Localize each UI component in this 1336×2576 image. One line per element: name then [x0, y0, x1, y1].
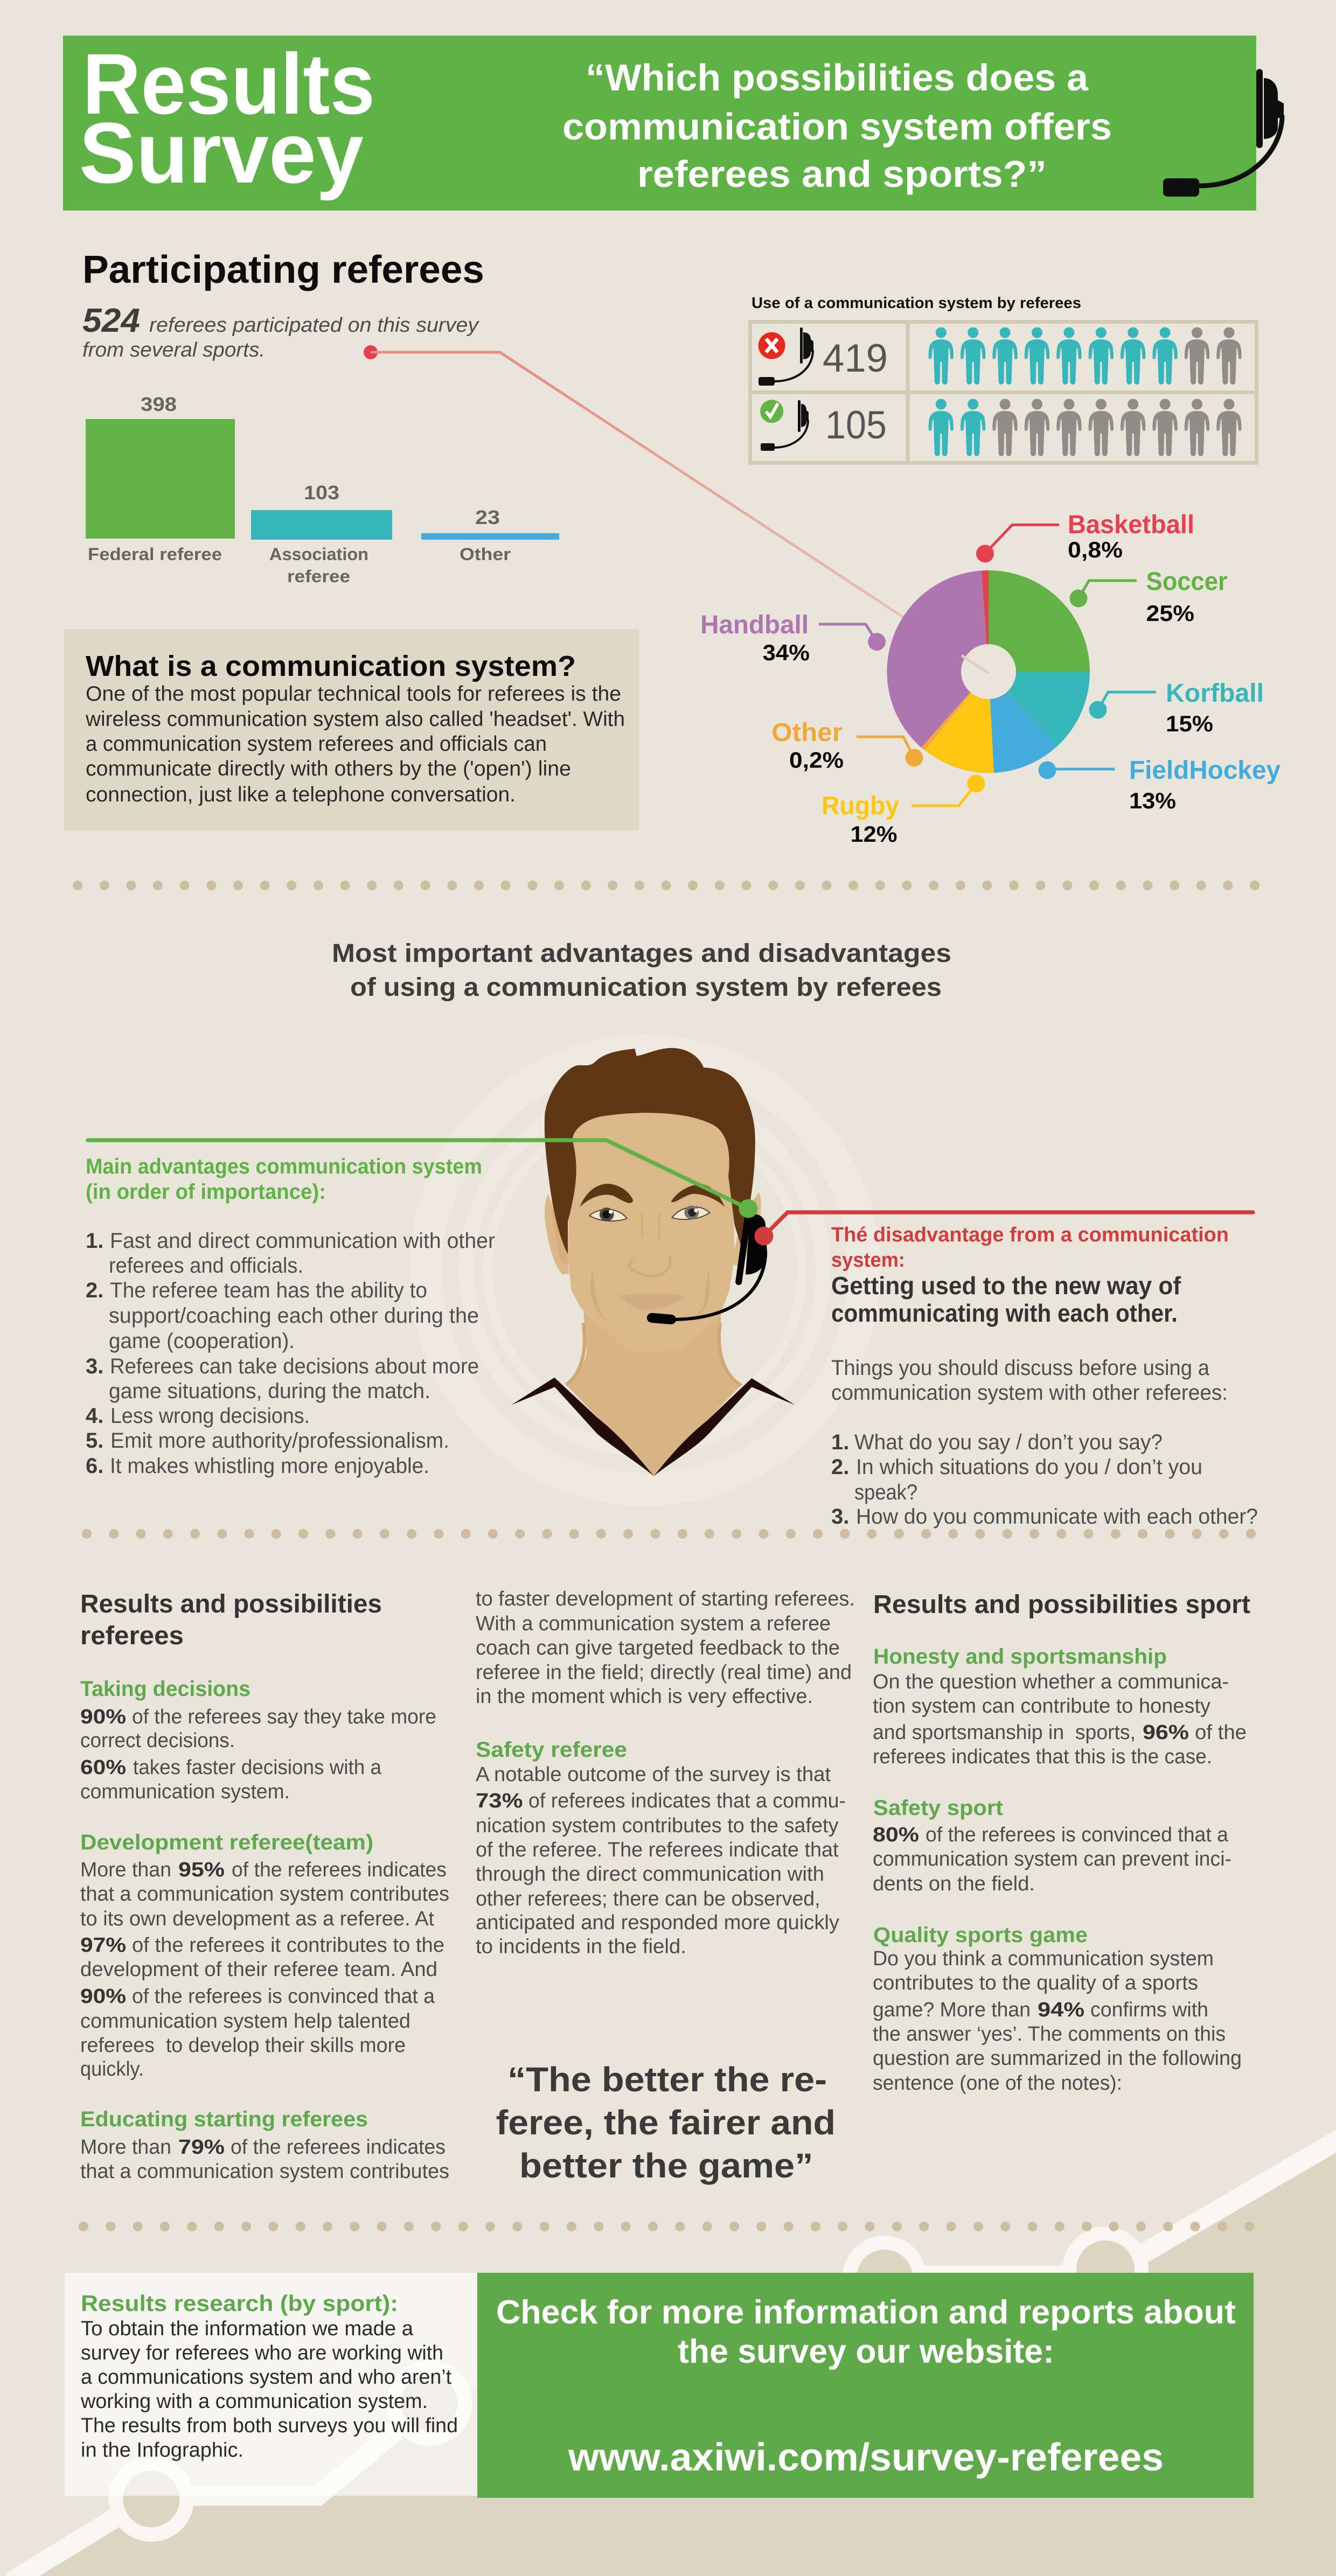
label: korfball: Korfball	[1166, 679, 1264, 708]
column: results and possibilities sport: confirms with	[1090, 1999, 1208, 2021]
hair	[545, 1048, 755, 1254]
column: results and possibilities referees: Educating starting referees	[80, 2107, 368, 2131]
column: continued and safety referee: to incidents in the field.	[476, 1936, 686, 1958]
label: other: Other	[771, 718, 843, 747]
pull quote: better the game”	[519, 2146, 813, 2185]
title: Results	[82, 36, 375, 132]
text block: the disadvantage	[831, 1224, 1258, 1528]
column: results and possibilities sport: referees indicates that this is the case.	[873, 1746, 1212, 1768]
text block: main advantages: 2.	[86, 1279, 103, 1302]
column: results and possibilities referees: of the referees indicates	[232, 1859, 447, 1881]
panel: what is a communication system	[64, 629, 639, 830]
column: results and possibilities sport: contributes to the quality of a sports	[873, 1972, 1198, 1994]
nose	[629, 1256, 670, 1276]
text block: main advantages: 4.	[86, 1404, 103, 1428]
ears	[545, 1194, 569, 1274]
column: results and possibilities sport: question are summarized in the following	[873, 2047, 1242, 2070]
column: results and possibilities referees: referees to develop their skills more	[80, 2034, 406, 2057]
panel: website call to action	[477, 2273, 1254, 2498]
text block: the disadvantage: Things you should discuss before using a	[831, 1356, 1210, 1380]
bar chart: 23	[475, 506, 500, 528]
label: soccer: Soccer	[1146, 568, 1227, 596]
column: results and possibilities sport: Safety sport	[873, 1796, 1003, 1820]
label: rugby	[822, 774, 985, 847]
mouth	[620, 1293, 685, 1310]
column: results and possibilities referees: quickly.	[80, 2058, 144, 2081]
text block: the disadvantage: 2.	[831, 1455, 849, 1479]
text block: main advantages: support/coaching each other during the	[109, 1304, 479, 1328]
text block: main advantages: Less wrong decisions.	[110, 1404, 310, 1428]
column: results and possibilities referees: communication system help talented	[80, 2010, 410, 2033]
column: results and possibilities sport: the answer ‘yes’. The comments on this	[873, 2023, 1226, 2046]
panel: what is a communication system: What is a communication system?	[86, 650, 576, 682]
label: soccer	[1070, 568, 1227, 626]
collar	[511, 1378, 795, 1476]
column: results and possibilities referees: More than	[80, 2136, 171, 2159]
text block: main advantages: game situations, during the match.	[109, 1379, 430, 1403]
label: handball	[700, 611, 886, 665]
column: results and possibilities sport: Quality sports game	[873, 1923, 1088, 1947]
text block: the disadvantage: 1.	[831, 1430, 849, 1454]
column: results and possibilities referees: development of their referee team. And	[80, 1958, 437, 1981]
panel: results research: Results research (by sport):	[81, 2291, 398, 2316]
panel: website call to action: the survey our website:	[678, 2333, 1054, 2370]
column: results and possibilities sport: sentence (one of the notes):	[873, 2072, 1122, 2095]
connector: referees to pie	[364, 345, 989, 673]
column: results and possibilities referees: 60%	[80, 1756, 126, 1779]
text block: main advantages: The referee team has the ability to	[110, 1279, 427, 1302]
column: results and possibilities referees: to its own development as a referee. At	[80, 1908, 434, 1930]
panel: participating referees	[82, 248, 559, 586]
column: results and possibilities referees: of the referees is convinced that a	[132, 1985, 435, 2008]
icon: no headset	[759, 327, 813, 386]
panel: results research: in the Infographic.	[81, 2439, 243, 2461]
panel: results research: working with a communication system.	[80, 2390, 428, 2413]
pull quote: “The better the re-	[507, 2060, 827, 2099]
neck	[566, 1300, 741, 1476]
text block: the disadvantage: 3.	[831, 1505, 849, 1528]
column: continued and safety referee: Safety referee	[476, 1738, 627, 1762]
text block: main advantages: (in order of importance):	[86, 1180, 326, 1204]
callout line: advantages	[88, 1140, 757, 1218]
column: results and possibilities sport: of the referees is convinced that a	[926, 1824, 1229, 1846]
text block: the disadvantage: What do you say / don’t you say?	[854, 1430, 1163, 1454]
label: handball: Handball	[700, 611, 809, 639]
column: results and possibilities referees: that a communication system contributes	[80, 2160, 449, 2183]
column: continued and safety referee: in the moment which is very effective.	[476, 1685, 813, 1708]
label: basketball: 0,8%	[1068, 537, 1123, 562]
text block: main advantages: It makes whistling more enjoyable.	[110, 1454, 429, 1478]
column: continued and safety referee: coach can give targeted feedback to the	[476, 1637, 840, 1659]
section heading: advantages and disadvantages	[332, 939, 951, 1002]
text block: main advantages: 6.	[86, 1454, 103, 1478]
panel: use of communication system table: Use of a communication system by referees	[752, 295, 1081, 312]
bar chart: 398	[141, 393, 177, 415]
panel: what is a communication system: One of the most popular technical tools for referees is the	[86, 682, 621, 706]
label: other: 0,2%	[789, 748, 844, 772]
text block: main advantages: 3.	[86, 1355, 103, 1378]
text block: main advantages: Emit more authority/professionalism.	[110, 1429, 449, 1453]
column: results and possibilities sport: 96%	[1143, 1721, 1189, 1744]
column: results and possibilities sport: On the question whether a communica-	[873, 1671, 1229, 1693]
column: results and possibilities referees	[80, 1590, 449, 2183]
column: continued and safety referee: of referees indicates that a commu-	[528, 1790, 846, 1812]
column: results and possibilities referees: referees	[80, 1622, 184, 1650]
label: field hockey	[1039, 756, 1281, 813]
column: continued and safety referee: A notable outcome of the survey is that	[476, 1763, 831, 1786]
panel: results research: The results from both surveys you will find	[81, 2414, 458, 2437]
column: results and possibilities sport: dents on the field.	[873, 1873, 1035, 1895]
panel: what is a communication system: a communication system referees and officials can	[86, 732, 547, 756]
label: field hockey: 13%	[1129, 788, 1176, 813]
column: results and possibilities referees: Taking decisions	[80, 1677, 250, 1701]
panel: what is a communication system: connection, just like a telephone conversation.	[86, 783, 516, 806]
column: results and possibilities referees: correct decisions.	[80, 1729, 235, 1752]
text block: the disadvantage: Getting used to the new way of	[831, 1272, 1181, 1300]
face	[568, 1104, 735, 1353]
text block: main advantages: referees and officials.	[109, 1254, 303, 1277]
panel: website call to action: Check for more information and reports about	[496, 2294, 1236, 2331]
bar chart	[86, 393, 559, 586]
number: 105: 105	[825, 403, 887, 447]
number: 419: 419	[823, 337, 888, 380]
panel: use of communication system table	[748, 295, 1258, 465]
panel: results research: To obtain the information we made a	[81, 2317, 414, 2340]
column: results and possibilities referees: of the referees say they take more	[132, 1706, 436, 1728]
text block: the disadvantage: system:	[831, 1249, 905, 1272]
label: korfball: 15%	[1166, 711, 1213, 736]
text block: the disadvantage: How do you communicate with each other?	[856, 1505, 1258, 1528]
column: results and possibilities sport: 80%	[873, 1824, 919, 1846]
text block: main advantages: Main advantages communication system	[86, 1155, 482, 1178]
text block: main advantages: game (cooperation).	[109, 1329, 295, 1353]
bar chart: Association	[269, 544, 368, 564]
column: results and possibilities sport: tion system can contribute to honesty	[873, 1695, 1210, 1718]
column: continued and safety referee: through the direct communication with	[476, 1863, 824, 1886]
intro text: 524	[82, 302, 140, 339]
header question: referees and sports?”	[637, 153, 1047, 195]
label: basketball: Basketball	[1068, 511, 1194, 539]
brows	[580, 1184, 725, 1207]
illustration: referee with headset	[426, 1048, 864, 1490]
column: results and possibilities referees: More than	[80, 1859, 171, 1881]
column: results and possibilities sport: of the	[1195, 1721, 1247, 1744]
column: results and possibilities referees: takes faster decisions with a	[133, 1756, 382, 1779]
column: results and possibilities referees: 79%	[178, 2136, 225, 2159]
column: results and possibilities referees: 97%	[80, 1934, 126, 1957]
text block: main advantages: Fast and direct communication with other	[110, 1229, 495, 1253]
title	[79, 36, 375, 201]
text block: main advantages: 1.	[86, 1229, 103, 1253]
pie chart: sports	[887, 570, 1090, 773]
label: field hockey: FieldHockey	[1129, 756, 1281, 785]
column: results and possibilities referees: Results and possibilities	[80, 1590, 382, 1618]
column: continued and safety referee: of the referee. The referees indicate that	[476, 1839, 839, 1861]
heading: Participating referees	[82, 248, 484, 291]
text block: the disadvantage: speak?	[854, 1481, 917, 1504]
label: rugby: Rugby	[822, 792, 899, 820]
column: results and possibilities sport: game? More than	[873, 1999, 1031, 2021]
column: results and possibilities sport: and sportsmanship in sports,	[873, 1721, 1136, 1744]
column: results and possibilities referees: of the referees it contributes to the	[132, 1934, 444, 1957]
headset	[739, 1218, 748, 1282]
label: soccer: 25%	[1146, 601, 1194, 626]
column: results and possibilities sport: Results and possibilities sport	[873, 1590, 1250, 1619]
label: basketball	[976, 511, 1194, 562]
header question: communication system offers	[562, 106, 1112, 148]
title: Survey	[79, 104, 364, 201]
column: continued and safety referee: referee in the field; directly (real time) and	[476, 1661, 852, 1684]
column: results and possibilities referees: of the referees indicates	[231, 2136, 446, 2159]
label: other	[771, 718, 923, 772]
header banner	[63, 36, 1284, 211]
intro text	[82, 302, 479, 361]
people row: 105	[929, 399, 1242, 456]
intro text: from several sports.	[82, 339, 265, 361]
column: results and possibilities sport	[873, 1590, 1250, 2095]
text block: the disadvantage: Thé disadvantage from a communication	[831, 1224, 1229, 1246]
eyes	[589, 1207, 710, 1221]
background graph line	[11, 2135, 1336, 2576]
text block: the disadvantage: communication system with other referees:	[831, 1381, 1228, 1405]
column: results and possibilities referees: 95%	[178, 1859, 225, 1881]
label: rugby: 12%	[850, 821, 897, 847]
panel: results research: survey for referees who are working with	[81, 2342, 443, 2364]
column: continued and safety referee: nication system contributes to the safety	[476, 1814, 838, 1837]
column: results and possibilities sport: Honesty and sportsmanship	[873, 1645, 1167, 1669]
label: handball: 34%	[763, 640, 810, 665]
column: results and possibilities referees: Development referee(team)	[80, 1831, 373, 1854]
text block: the disadvantage: communicating with each other.	[831, 1299, 1178, 1327]
text block: the disadvantage: In which situations do you / don’t you	[856, 1455, 1202, 1479]
column: results and possibilities referees: 90%	[80, 1985, 126, 2008]
bar chart: 103	[304, 481, 339, 504]
panel: what is a communication system: wireless communication system also called 'headset'. With	[85, 708, 625, 731]
panel: website call to action: www.axiwi.com/survey-referees	[568, 2436, 1164, 2479]
intro text: referees participated on this survey	[149, 314, 479, 337]
column: results and possibilities sport: communication system can prevent inci-	[873, 1848, 1231, 1870]
section heading: advantages and disadvantages: Most important advantages and disadvantages	[332, 939, 951, 968]
bar chart: Federal referee	[88, 544, 222, 564]
column: results and possibilities referees: that a communication system contributes	[80, 1883, 449, 1905]
text block: main advantages	[86, 1155, 495, 1478]
text block: main advantages: Referees can take decisions about more	[110, 1355, 479, 1378]
label: korfball	[1089, 679, 1264, 736]
panel: results research	[65, 2273, 477, 2496]
column: continued and safety referee: 73%	[476, 1790, 523, 1812]
column: continued and safety referee: other referees; there can be observed,	[476, 1888, 820, 1910]
icon: has headset	[760, 400, 809, 451]
column: results and possibilities sport: Do you think a communication system	[873, 1947, 1214, 1970]
icon: headset	[1163, 69, 1284, 197]
bar chart: referee	[287, 567, 350, 586]
header question: “Which possibilities does a	[586, 57, 1089, 99]
column: continued and safety referee: With a communication system a referee	[476, 1612, 831, 1635]
pull quote: feree, the fairer and	[496, 2103, 836, 2142]
column: results and possibilities sport: 94%	[1038, 1999, 1084, 2021]
section heading: advantages and disadvantages: of using a communication system by referees	[350, 973, 942, 1002]
text block: main advantages: 5.	[86, 1429, 103, 1453]
column: continued and safety referee	[476, 1588, 855, 1958]
column: results and possibilities referees: 90%	[80, 1706, 126, 1728]
bar chart: Other	[460, 544, 511, 564]
column: continued and safety referee: to faster development of starting referees.	[476, 1588, 855, 1610]
column: continued and safety referee: anticipated and responded more quickly	[476, 1911, 839, 1934]
column: results and possibilities referees: communication system.	[80, 1781, 290, 1803]
panel: what is a communication system: communicate directly with others by the ('open') line	[86, 757, 571, 780]
pull quote	[496, 2060, 836, 2185]
header question	[562, 57, 1112, 195]
panel: results research: a communications system and who aren’t	[81, 2366, 451, 2389]
callout line: disadvantage	[754, 1212, 1253, 1245]
people row: 419	[929, 327, 1242, 385]
